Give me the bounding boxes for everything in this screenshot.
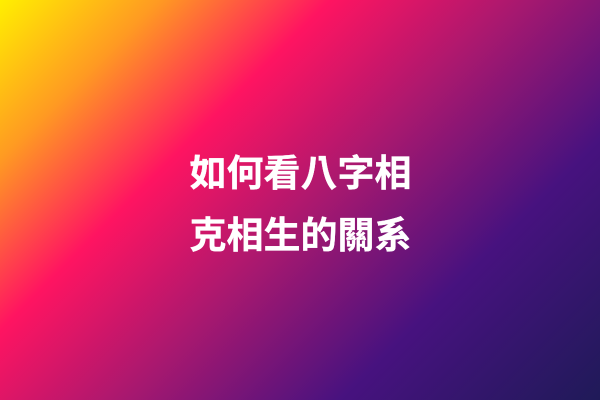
title: 如何看八字相 <box>190 153 412 194</box>
title: 克相生的關系 <box>190 215 412 256</box>
title <box>190 153 412 256</box>
